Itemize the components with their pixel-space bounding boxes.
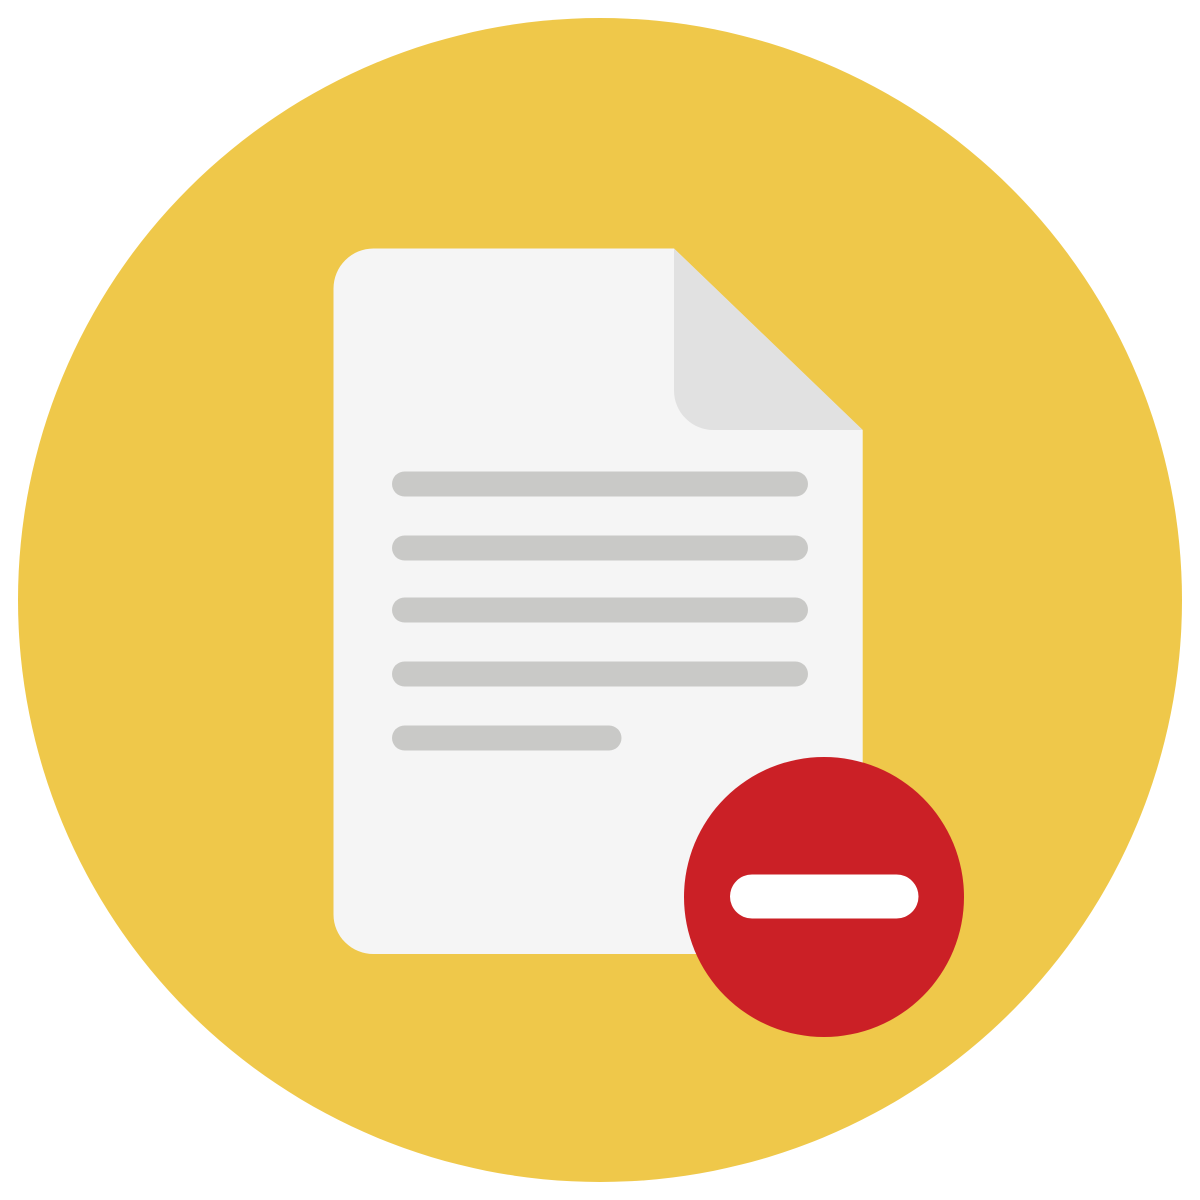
red circle	[684, 757, 964, 1037]
minus badge	[684, 757, 964, 1037]
white minus bar	[730, 874, 918, 918]
text line 1	[392, 472, 808, 496]
folded corner	[674, 248, 863, 430]
document	[334, 248, 863, 954]
text line 5	[392, 726, 622, 750]
text line 4	[392, 662, 808, 686]
text line 2	[392, 536, 808, 560]
text line 3	[392, 598, 808, 622]
text lines	[392, 472, 808, 750]
document page	[334, 248, 863, 954]
